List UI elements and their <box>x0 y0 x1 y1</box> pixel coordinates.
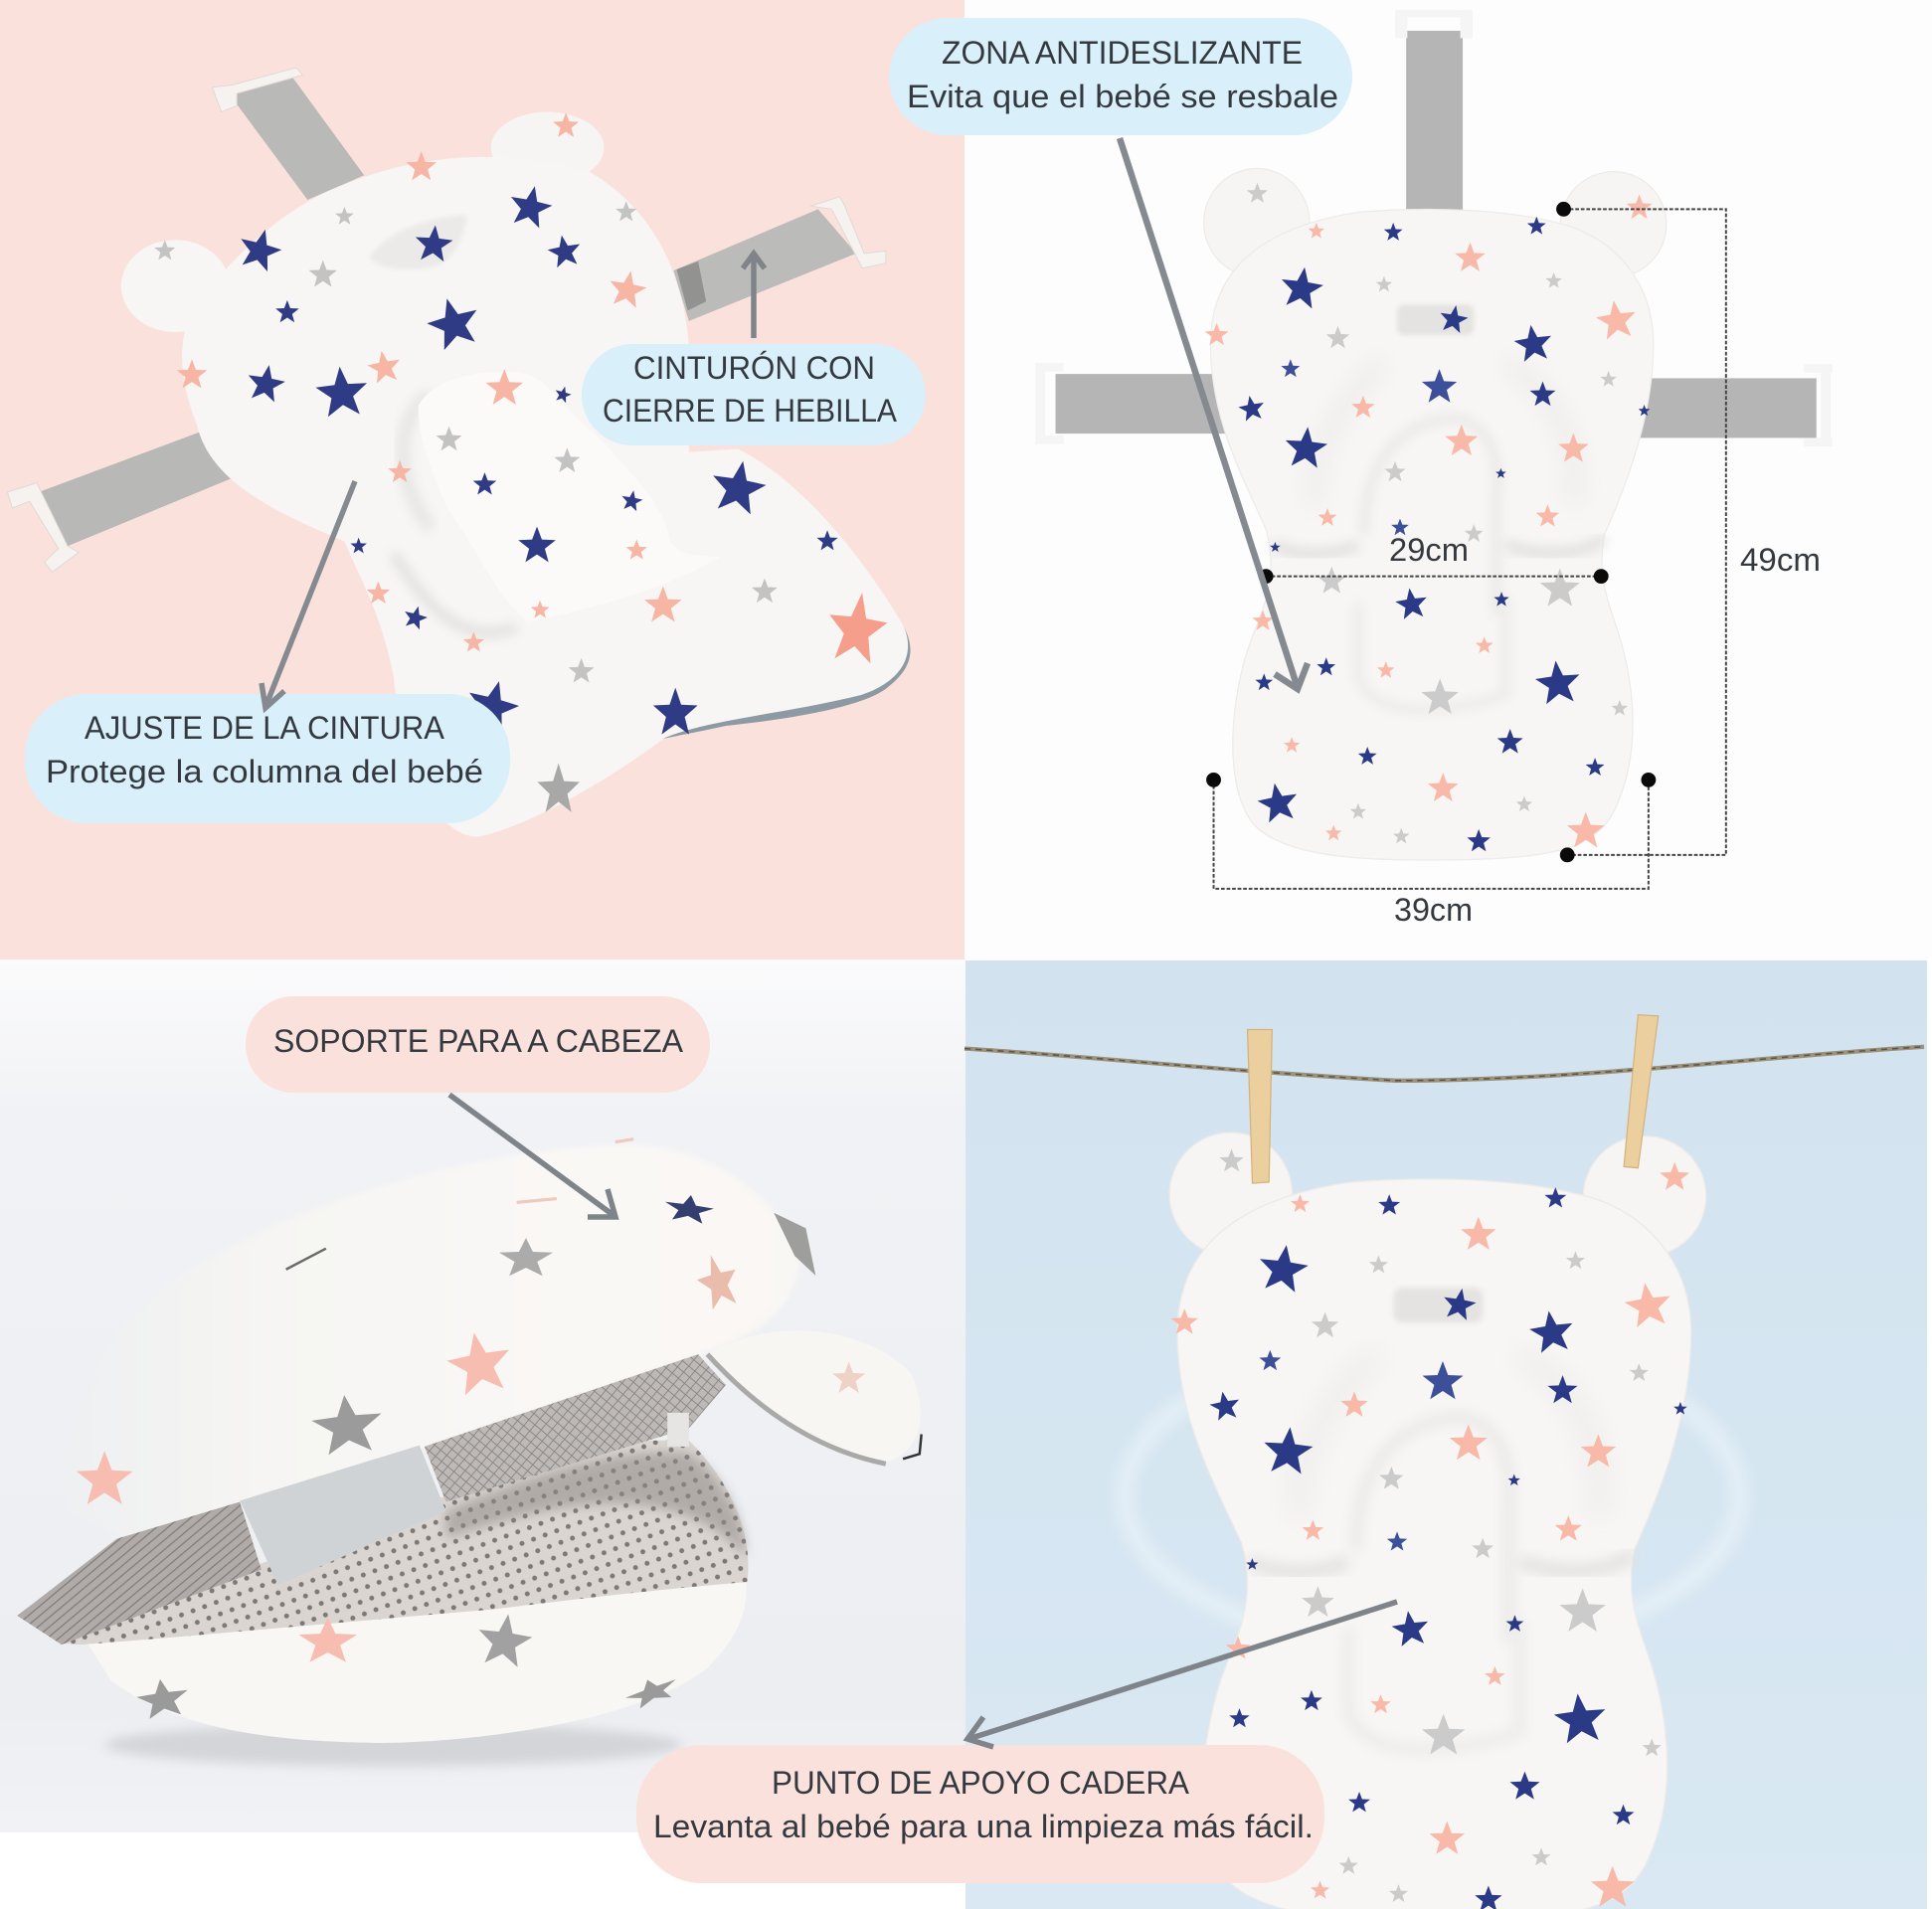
arrow: non-slip zone <box>1120 138 1308 689</box>
callout: non-slip zone: ZONA ANTIDESLIZANTE <box>942 35 1303 71</box>
stars <box>77 1139 865 1720</box>
callout: non-slip zone: Evita que el bebé se resbale <box>907 79 1338 114</box>
stars on cushion <box>235 182 838 735</box>
callout: belt with buckle: CINTURÓN CON <box>633 350 875 386</box>
clothespins <box>1248 1015 1659 1183</box>
callout: hip support point: Levanta al bebé para una limpieza más fácil. <box>653 1809 1314 1844</box>
callout: hip support point: PUNTO DE APOYO CADERA <box>772 1765 1190 1801</box>
callout: non-slip zone <box>889 18 1352 135</box>
callout: waist adjustment: Protege la columna del bebé <box>46 754 483 789</box>
callout: head support: SOPORTE PARA A CABEZA <box>273 1023 684 1059</box>
straps <box>1035 10 1833 446</box>
mesh layers <box>17 1354 748 1645</box>
callout: hip support point <box>636 1745 1324 1883</box>
upper cushion <box>66 1144 922 1539</box>
straps <box>7 68 886 572</box>
callout: waist adjustment <box>25 694 510 823</box>
callout: waist adjustment: AJUSTE DE LA CINTURA <box>85 710 445 746</box>
cushion in perspective <box>121 112 911 836</box>
callout: belt with buckle: CIERRE DE HEBILLA <box>603 393 898 429</box>
dimension label: 29cm: 29cm <box>1389 532 1469 568</box>
dimension label: 49cm: 49cm <box>1740 542 1821 578</box>
rope <box>965 1047 1924 1081</box>
arrow: waist adjustment <box>262 481 355 708</box>
arrow: head support <box>449 1095 615 1217</box>
panel: product dimensions <box>965 0 1932 959</box>
arrow: hip support <box>967 1602 1397 1747</box>
callout: head support <box>246 996 710 1093</box>
panel: head support side view <box>0 959 966 1909</box>
soft water swirl <box>1125 1342 1739 1649</box>
dimension label: 39cm: 39cm <box>1394 892 1473 928</box>
callout: belt with buckle <box>582 344 926 445</box>
dimension lines <box>1206 202 1726 889</box>
panel: waist adjustment and buckle belt <box>0 0 965 959</box>
arrow: belt <box>743 254 765 338</box>
panel: drying on a clothesline <box>965 959 1932 1909</box>
hanging cushion <box>1169 1132 1706 1909</box>
cushion, front view <box>1204 168 1667 860</box>
lower cushion <box>80 1570 747 1767</box>
